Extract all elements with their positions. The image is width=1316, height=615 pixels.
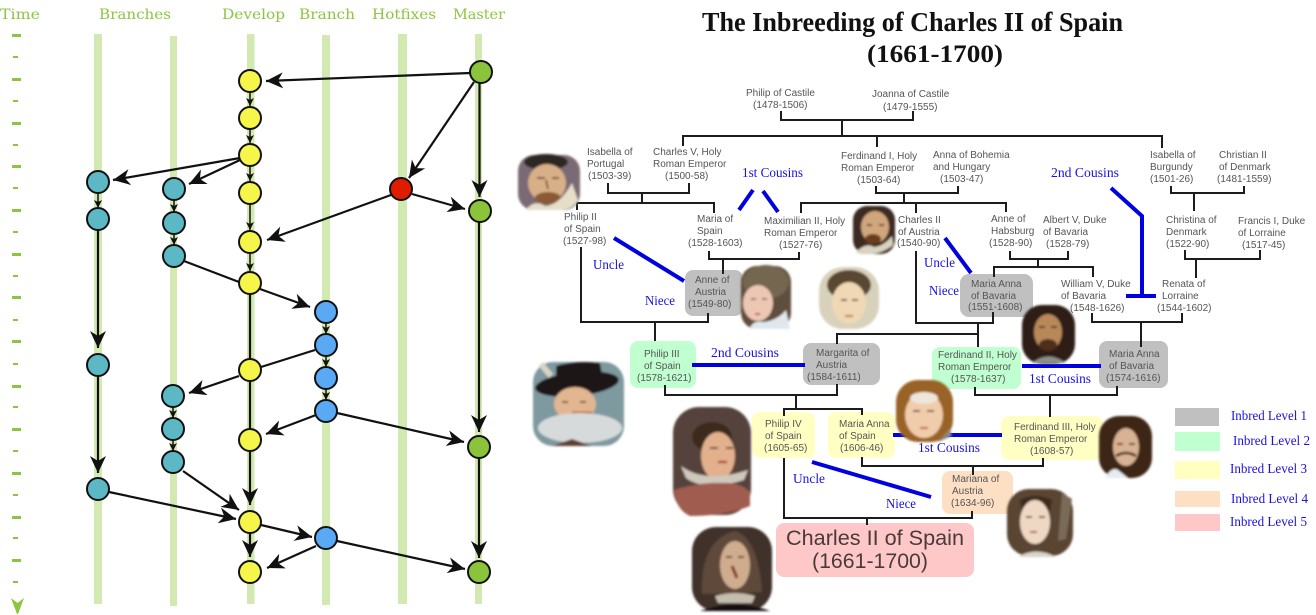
person names: of Denmark bbox=[1219, 162, 1272, 173]
portrait: Mariana of Austria bbox=[1007, 489, 1073, 557]
person names: Habsburg bbox=[991, 226, 1034, 237]
portrait: Anne of Austria bbox=[741, 265, 791, 329]
person names: (1478-1506) bbox=[753, 100, 807, 111]
title: The Inbreeding of Charles II of Spain bbox=[702, 7, 1123, 37]
person names: of Spain bbox=[839, 431, 876, 442]
column headings: Branch bbox=[299, 7, 355, 23]
person names: (1500-58) bbox=[665, 171, 708, 182]
person names: (1606-46) bbox=[840, 443, 883, 454]
person names: (1503-47) bbox=[940, 174, 983, 185]
person names: Ferdinand II, Holy bbox=[938, 350, 1017, 361]
person names: Austria bbox=[695, 287, 727, 298]
person names: Philip II bbox=[564, 212, 597, 223]
person names: (1578-1621) bbox=[637, 373, 691, 384]
release branch nodes bbox=[315, 301, 337, 549]
person names: (1574-1616) bbox=[1106, 373, 1160, 384]
relationship labels: 1st Cousins bbox=[918, 440, 980, 455]
person names: Charles II bbox=[898, 215, 941, 226]
portrait: Ferdinand II bbox=[1022, 305, 1075, 364]
person names: of Spain bbox=[765, 431, 802, 442]
person names: (1634-96) bbox=[951, 498, 994, 509]
legend bbox=[1175, 408, 1310, 531]
person names: (1527-98) bbox=[563, 236, 606, 247]
relationship labels: 2nd Cousins bbox=[711, 345, 779, 360]
person names: Philip III bbox=[644, 349, 680, 360]
person names: William V, Duke bbox=[1061, 279, 1131, 290]
portrait: Philip II bbox=[518, 154, 580, 210]
person names: Philip of Castile bbox=[746, 88, 815, 99]
column headings: Develop bbox=[222, 7, 285, 23]
column headings: Master bbox=[453, 7, 505, 23]
column headings: Branches bbox=[99, 7, 171, 23]
relationship labels: Niece bbox=[645, 293, 675, 308]
portrait: Maria Anna of Spain bbox=[896, 380, 953, 442]
portrait: Philip III bbox=[533, 362, 624, 446]
person names: Austria bbox=[952, 486, 984, 497]
person names: Anne of bbox=[695, 275, 730, 286]
person names: Charles V, Holy bbox=[653, 147, 722, 158]
person names: Ferdinand III, Holy bbox=[1014, 422, 1096, 433]
person names: (1661-1700) bbox=[812, 550, 928, 573]
person names: (1481-1559) bbox=[1217, 174, 1271, 185]
person names bbox=[563, 88, 1306, 573]
person names: Renata of bbox=[1162, 279, 1206, 290]
person names: (1544-1602) bbox=[1157, 303, 1211, 314]
person names: of Bavaria bbox=[1109, 361, 1154, 372]
person names: Christina of bbox=[1166, 215, 1217, 226]
column headings bbox=[0, 7, 505, 23]
person names: Burgundy bbox=[1150, 162, 1193, 173]
person names: Austria bbox=[816, 360, 848, 371]
person names: Christian II bbox=[1219, 150, 1267, 161]
person names: (1528-90) bbox=[989, 238, 1032, 249]
person names: (1578-1637) bbox=[951, 374, 1005, 385]
person names: Roman Emperor bbox=[1014, 434, 1088, 445]
time axis ticks bbox=[11, 34, 24, 614]
person names: (1584-1611) bbox=[807, 372, 861, 383]
legend: level 3: Inbred Level 3 bbox=[1230, 461, 1307, 476]
person names: (1528-1603) bbox=[688, 238, 742, 249]
person names: Portugal bbox=[587, 159, 624, 170]
master nodes bbox=[468, 61, 492, 583]
person names: Isabella of bbox=[1150, 150, 1196, 161]
person names: Roman Emperor bbox=[938, 362, 1012, 373]
person names: (1540-90) bbox=[897, 238, 940, 249]
person names: of Bavaria bbox=[971, 291, 1016, 302]
person names: of Bavaria bbox=[1061, 291, 1106, 302]
person names: Mariana of bbox=[952, 474, 999, 485]
title bbox=[702, 7, 1123, 68]
coloured person boxes bbox=[630, 270, 1168, 577]
person names: Maximilian II, Holy bbox=[764, 216, 845, 227]
legend: level 2: Inbred Level 2 bbox=[1233, 433, 1310, 448]
person names: Isabella of bbox=[587, 147, 633, 158]
relationship labels: 1st Cousins bbox=[742, 165, 803, 180]
column headings: Time bbox=[0, 7, 40, 23]
arrows bbox=[98, 73, 480, 569]
relationship labels: 2nd Cousins bbox=[1051, 165, 1119, 180]
person names: Margarita of bbox=[816, 348, 870, 359]
person names: Albert V, Duke bbox=[1043, 215, 1107, 226]
legend: level 5: Inbred Level 5 bbox=[1230, 514, 1307, 529]
person names: Philip IV bbox=[765, 419, 802, 430]
person names: (1548-1626) bbox=[1070, 303, 1124, 314]
person names: Maria Anna bbox=[971, 279, 1022, 290]
person names: (1479-1555) bbox=[883, 102, 937, 113]
person names: Charles II of Spain bbox=[786, 527, 964, 550]
person names: of Lorraine bbox=[1238, 228, 1286, 239]
person names: of Spain bbox=[564, 224, 601, 235]
relationship labels: 1st Cousins bbox=[1029, 371, 1091, 386]
title: (1661-1700) bbox=[867, 41, 1003, 68]
person names: Maria of bbox=[697, 214, 733, 225]
panel: git branching diagram bbox=[0, 7, 505, 614]
person names: (1501-26) bbox=[1150, 174, 1193, 185]
portrait: Charles II bbox=[692, 527, 772, 611]
person names: Anna of Bohemia bbox=[933, 150, 1010, 161]
person names: Spain bbox=[697, 226, 723, 237]
person names: (1503-64) bbox=[857, 175, 900, 186]
person names: (1503-39) bbox=[588, 171, 631, 182]
person names: of Austria bbox=[898, 227, 940, 238]
person names: Lorraine bbox=[1162, 291, 1199, 302]
legend: level 1: Inbred Level 1 bbox=[1231, 408, 1307, 423]
person names: (1551-1608) bbox=[968, 302, 1022, 313]
person names: Roman Emperor bbox=[764, 228, 838, 239]
person names: (1608-57) bbox=[1030, 446, 1073, 457]
person names: and Hungary bbox=[933, 162, 990, 173]
relationship lines bbox=[614, 188, 1156, 497]
person names: Maria Anna bbox=[1109, 349, 1160, 360]
person names: Joanna of Castile bbox=[872, 89, 950, 100]
relationship labels: Niece bbox=[886, 496, 916, 511]
person names: (1527-76) bbox=[779, 240, 822, 251]
person names: (1605-65) bbox=[764, 443, 807, 454]
branch rails bbox=[94, 34, 482, 606]
relationship labels bbox=[593, 165, 1119, 511]
person names: Denmark bbox=[1166, 227, 1208, 238]
develop nodes bbox=[239, 70, 261, 583]
person names: Francis I, Duke bbox=[1238, 216, 1306, 227]
person names: Ferdinand I, Holy bbox=[841, 151, 917, 162]
person names: Roman Emperor bbox=[653, 159, 727, 170]
relationship labels: Uncle bbox=[793, 471, 825, 486]
person names: of Bavaria bbox=[1043, 227, 1088, 238]
panel: family tree bbox=[518, 7, 1310, 611]
person names: (1522-90) bbox=[1166, 239, 1209, 250]
portrait: Charles II of Austria bbox=[853, 206, 895, 254]
column headings: Hotfixes bbox=[372, 7, 436, 23]
feature branch nodes bbox=[87, 171, 185, 500]
relationship labels: Uncle bbox=[593, 257, 624, 272]
person names: Anne of bbox=[991, 214, 1026, 225]
portrait: Margarita of Austria bbox=[819, 267, 879, 329]
relationship labels: Niece bbox=[929, 283, 959, 298]
hotfix node bbox=[390, 178, 412, 200]
person names: (1528-79) bbox=[1046, 239, 1089, 250]
relationship labels: Uncle bbox=[924, 255, 955, 270]
person names: (1517-45) bbox=[1242, 240, 1285, 251]
person names: Maria Anna bbox=[839, 419, 890, 430]
family connector lines bbox=[577, 111, 1260, 525]
person names: Roman Emperor bbox=[841, 163, 915, 174]
legend: level 4: Inbred Level 4 bbox=[1231, 491, 1308, 506]
portrait: Ferdinand III bbox=[1099, 416, 1152, 478]
person names: (1549-80) bbox=[688, 299, 731, 310]
portrait: Philip IV bbox=[673, 407, 751, 516]
person names: of Spain bbox=[644, 361, 681, 372]
